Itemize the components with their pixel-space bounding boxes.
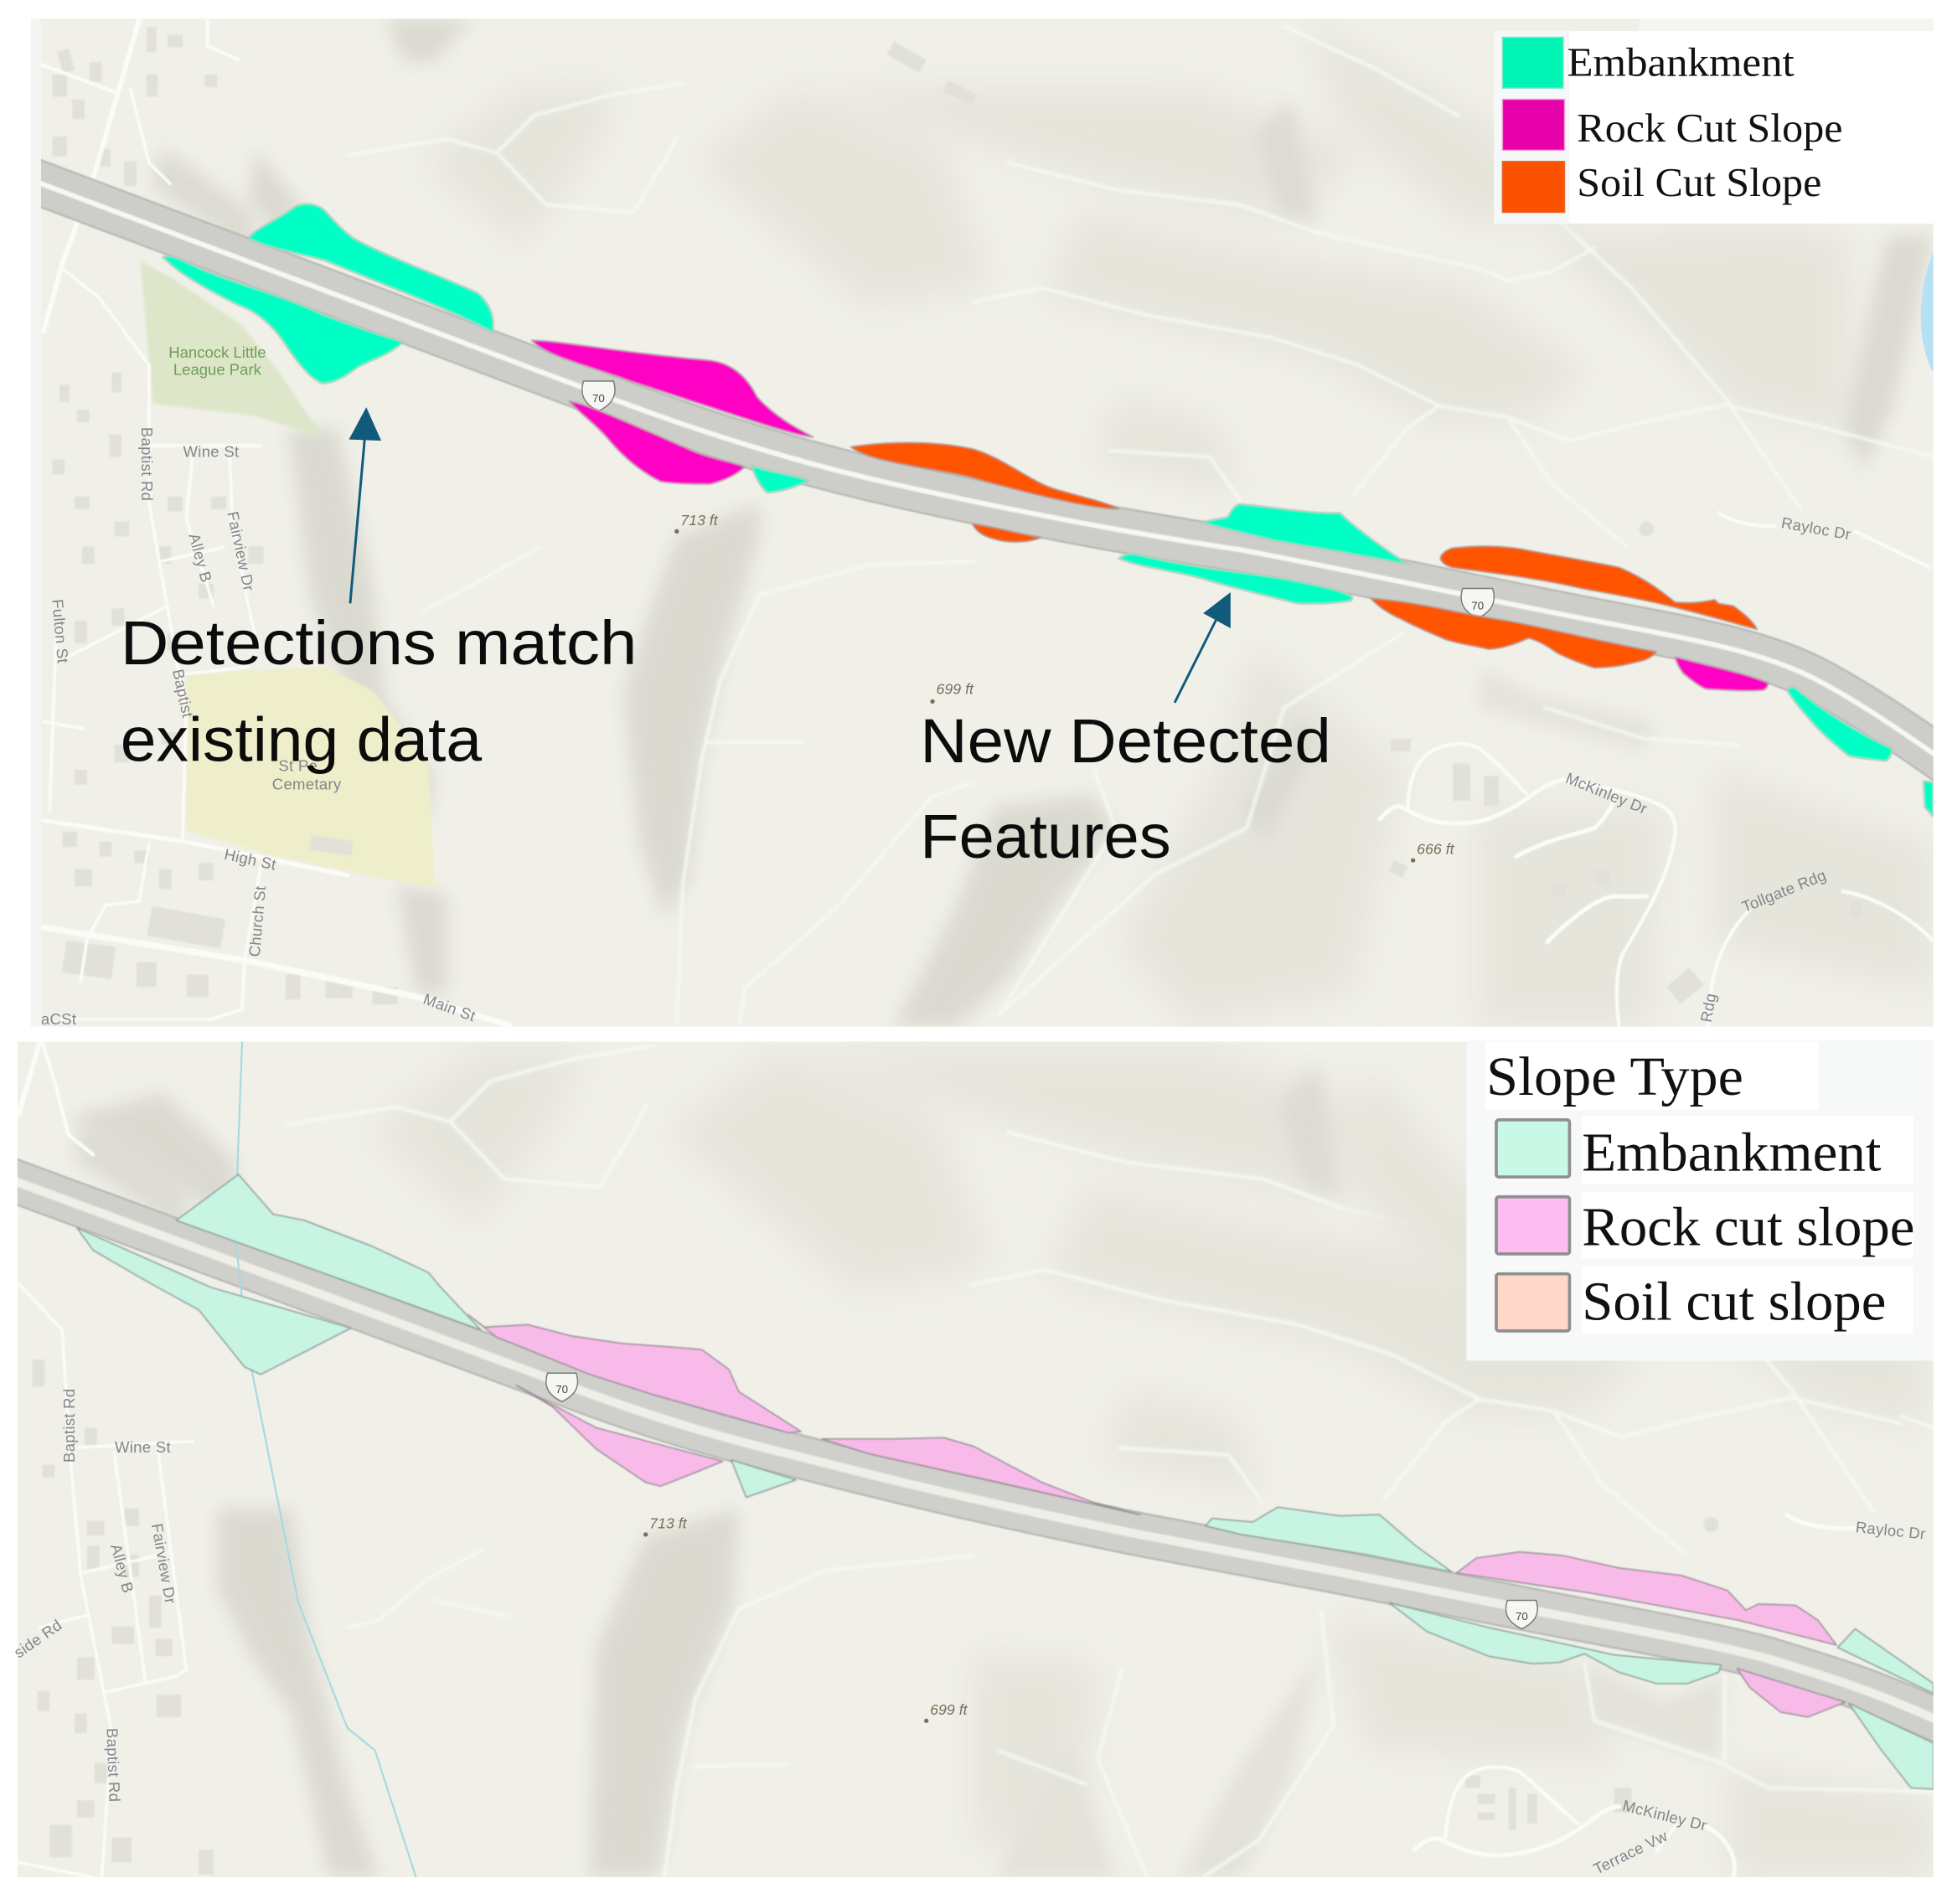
detected soil cut slope polygons [850, 442, 1757, 668]
map labels: Baptist Rd [138, 427, 156, 501]
hillshade ridges [348, 1416, 1934, 1877]
map labels: McKinley Dr [1621, 1796, 1709, 1834]
legend label background: embankment [1582, 1116, 1913, 1184]
map labels: Tollgate Rdg [1739, 866, 1829, 916]
arrow: to new detected features [1175, 592, 1231, 703]
map labels [10, 1389, 1927, 1878]
callout: new detected features: New Detected [920, 706, 1331, 776]
cemetery area [186, 667, 435, 888]
map labels: High St [223, 845, 278, 874]
detected rock cut slope polygons [531, 340, 1769, 691]
map labels: Alley B [107, 1542, 137, 1595]
legend: slope type [1466, 1040, 1934, 1360]
map labels [41, 343, 1852, 1028]
legend label: rock cut slope: Rock cut slope [1582, 1198, 1914, 1258]
legend label: soil cut slope: Soil Cut Slope [1577, 159, 1821, 205]
legend label: soil cut slope: Soil cut slope [1582, 1272, 1886, 1333]
inventory rock cut slope polygons [468, 1315, 1845, 1717]
detected embankment polygons [163, 204, 1934, 817]
map labels: League Park [173, 361, 262, 379]
base terrain map [0, 1042, 1947, 1877]
map labels: Fulton St [49, 598, 72, 664]
legend swatch: soil cut slope [1502, 162, 1564, 212]
hillshade ridges [680, 28, 1890, 1014]
map labels: 699 ft [930, 1701, 968, 1718]
map labels: 713 ft [680, 512, 719, 529]
building footprints [33, 1360, 1718, 1875]
icon: interstate 70 shield west [582, 381, 615, 411]
legend swatch: rock cut slope [1496, 1197, 1569, 1254]
legend swatch: embankment [1496, 1120, 1569, 1177]
map labels: St Pe [278, 756, 318, 774]
inventory embankment polygons [77, 1174, 1934, 1789]
icon: interstate 70 shield east [1505, 1600, 1537, 1629]
icon: interstate 70 shield east: 70 [1516, 1610, 1528, 1623]
legend title: Slope Type [1486, 1047, 1743, 1107]
callout: new detected features [920, 706, 1331, 871]
interstate highway [0, 1176, 1947, 1726]
map labels: 666 ft [1417, 841, 1455, 858]
map labels: 699 ft [937, 681, 974, 698]
map labels: Alley B [185, 531, 215, 585]
callout: detections match existing data: Detections match [121, 608, 637, 678]
arrow: to matching detections [349, 407, 381, 603]
base terrain map [25, 18, 1947, 1027]
map labels: Terrace Vw [1591, 1827, 1671, 1878]
legend label: embankment: Embankment [1567, 39, 1795, 85]
legend label: embankment: Embankment [1582, 1123, 1881, 1184]
map labels: 713 ft [649, 1515, 688, 1532]
map labels: Baptist [169, 668, 197, 720]
map labels: Rayloc Dr [1855, 1518, 1927, 1543]
map labels: Rayloc Dr [1780, 513, 1852, 543]
panel: existing slope inventory map [0, 1040, 1947, 1878]
icon: interstate 70 shield west [546, 1373, 578, 1401]
map labels: Baptist Rd [103, 1728, 124, 1803]
map labels: Hancock Little [168, 343, 266, 361]
legend label background: rock cut slope [1582, 1192, 1913, 1259]
callout: detections match existing data: existing data [121, 705, 483, 775]
legend swatch: soil cut slope [1496, 1274, 1569, 1331]
map labels: aCSt [41, 1010, 77, 1028]
map labels: Rdg [1697, 992, 1719, 1024]
icon: interstate 70 shield east [1461, 589, 1494, 618]
map labels: Wine St [115, 1438, 171, 1456]
legend swatch: embankment [1502, 37, 1563, 88]
legend label: rock cut slope: Rock Cut Slope [1577, 105, 1842, 151]
legend: detected slope classes [1494, 18, 1934, 224]
hillshade gullies [248, 18, 1934, 1027]
map labels: Church St [245, 885, 269, 957]
panel edge strip [31, 18, 41, 1027]
map labels: Fairview Dr [148, 1522, 179, 1605]
local streets [18, 1042, 1855, 1877]
legend label background: soil cut slope [1582, 1267, 1913, 1334]
map labels: Wine St [183, 442, 240, 460]
lake at right edge [1921, 252, 1934, 373]
map labels: Cemetary [272, 776, 342, 793]
map labels: McKinley Dr [1563, 769, 1650, 818]
terrain shading [974, 1068, 1934, 1877]
terrain shading [1118, 18, 1934, 1027]
legend swatch: rock cut slope [1502, 100, 1564, 150]
map labels: side Rd [10, 1616, 65, 1661]
callout: new detected features: Features [920, 802, 1171, 871]
building footprints [52, 28, 1862, 1004]
icon: interstate 70 shield west: 70 [592, 392, 605, 405]
map labels: Baptist Rd [60, 1389, 78, 1463]
local streets [41, 20, 1932, 1027]
park area [140, 261, 323, 437]
map labels: Main St [421, 990, 478, 1025]
hillshade gullies [75, 1092, 1725, 1877]
callout: detections match existing data [121, 608, 637, 775]
icon: interstate 70 shield east: 70 [1471, 600, 1484, 612]
icon: interstate 70 shield west: 70 [555, 1383, 568, 1396]
panel: detected slope features map [25, 18, 1947, 1028]
interstate highway [25, 178, 1947, 765]
stream line [236, 1042, 416, 1877]
map labels: Fairview Dr [224, 510, 258, 593]
